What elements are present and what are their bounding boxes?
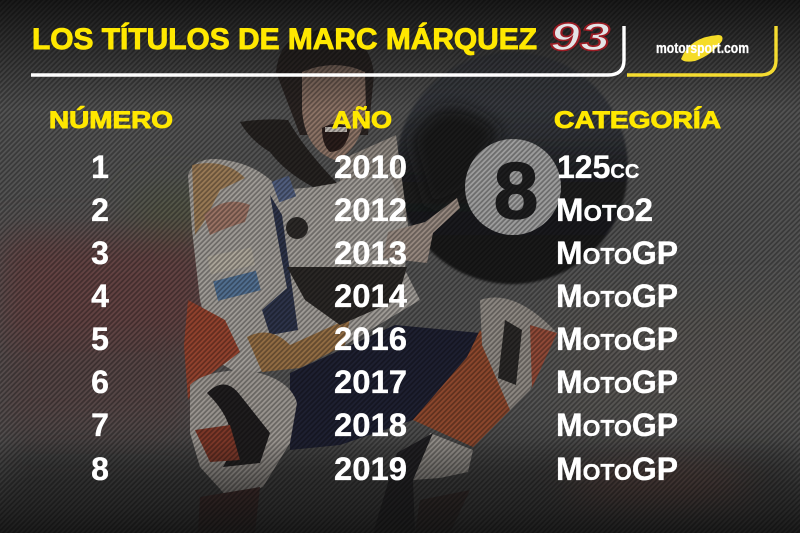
table column: año: 2012 [334,192,407,228]
shin dark [373,433,433,533]
eight ball: 8 [494,146,538,235]
title underline white [31,26,624,75]
navy thigh [290,325,480,450]
torso suit [188,159,420,375]
table column: categoría: 125CC [557,149,639,185]
orange lower leg [413,330,520,447]
table column: número: 7 [91,407,109,443]
right arm / finger [383,198,460,263]
table column: categoría: MOTOGP [556,321,678,357]
table column: número: 4 [91,278,109,314]
table column: año: 2010 [334,149,407,185]
repsol badges [207,176,308,301]
table column: número: 3 [91,235,109,271]
arm blue edge [262,195,298,335]
table column: número [91,149,109,487]
table column: número: 8 [91,451,109,487]
table column: número: 6 [91,364,109,400]
table column: año: 2016 [334,321,407,357]
table column: año: 2019 [334,451,407,487]
column heading: año: AÑO [332,106,392,134]
eight ball [396,52,628,284]
table column: año: 2013 [334,235,407,271]
logo panel underline yellow [627,26,776,75]
table column: año: 2017 [334,364,407,400]
table column: categoría: MOTOGP [556,364,678,400]
motorsport logo: motorsport.com [656,41,749,57]
table column: categoría: MOTOGP [556,407,678,443]
table column: número: 1 [91,149,109,185]
title: LOS TÍTULOS DE MARC MÁRQUEZ [32,22,537,56]
table column: categoría: MOTO2 [556,192,653,228]
column heading: número: NÚMERO [49,106,173,134]
rider photo [184,30,628,533]
table column: número: 5 [91,321,109,357]
motorsport logo [656,35,749,62]
shoulder [192,163,245,235]
knee slider group [190,370,297,533]
table column: año: 2018 [334,407,407,443]
table column: año [334,149,407,487]
head [276,30,408,240]
boot toe [413,433,473,480]
logo repsol front [247,318,350,372]
table column: número: 2 [91,192,109,228]
left suit side red [184,300,240,400]
table column: año: 2014 [334,278,407,314]
collar [240,119,337,187]
table column: categoría: MOTOGP [556,451,678,487]
table column: categoría: MOTOGP [556,235,678,271]
column heading: categoría: CATEGORÍA [554,106,721,134]
table column: categoría: MOTOGP [556,278,678,314]
table column: categoría [556,149,678,487]
icon: number 93: 93 [550,16,610,59]
